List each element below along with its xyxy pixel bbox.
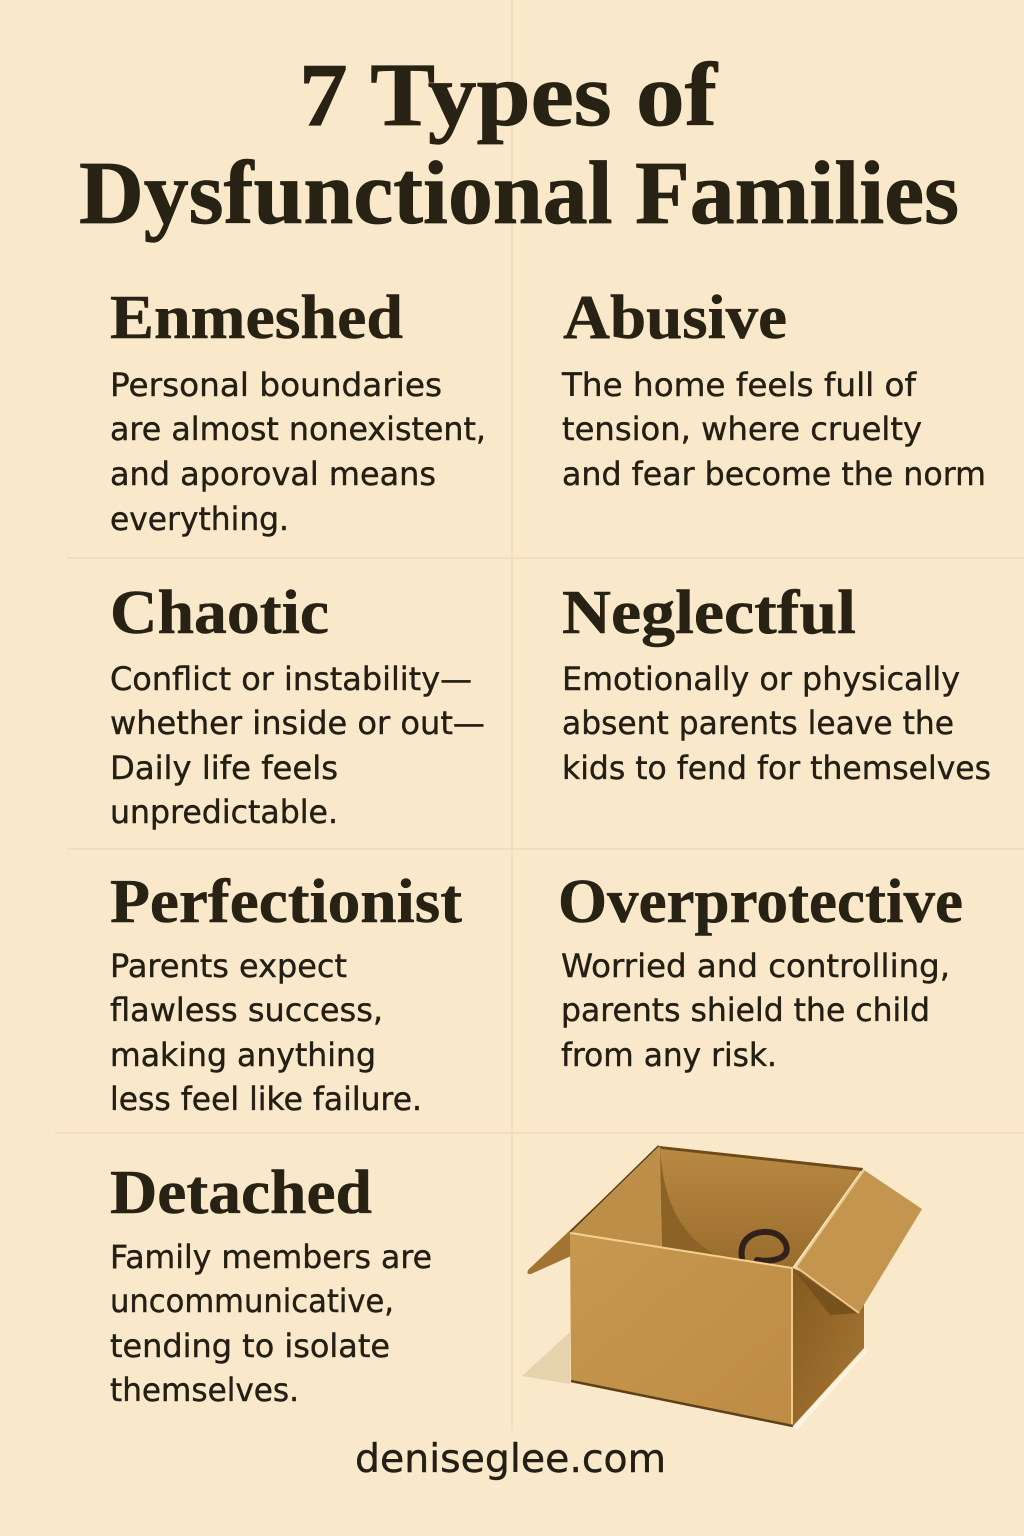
title (79, 46, 959, 243)
panel: Overprotective (558, 868, 963, 1074)
title: 7 Types of (299, 46, 718, 145)
panel: Abusive (561, 284, 986, 493)
panel: Abusive: and fear become the norm (562, 455, 986, 493)
icon: empty cardboard box (522, 1146, 922, 1430)
panel: Neglectful (562, 579, 991, 787)
panel: Enmeshed: are almost nonexistent, (110, 410, 486, 448)
panel: Neglectful: kids to fend for themselves (562, 749, 991, 787)
panel: Chaotic: Conflict or instability— (110, 660, 472, 698)
panel: Detached: themselves. (110, 1371, 299, 1409)
panel: Overprotective: parents shield the child (561, 991, 930, 1029)
title: Dysfunctional Families (79, 144, 959, 243)
panel: Neglectful: absent parents leave the (562, 704, 954, 742)
panel: Perfectionist: making anything (110, 1036, 376, 1074)
panel: Overprotective: from any risk. (561, 1036, 777, 1074)
website footer: deniseglee.com (355, 1437, 666, 1482)
panel: Perfectionist: flawless success, (110, 991, 383, 1029)
panel: Chaotic: unpredictable. (110, 793, 338, 831)
panel: Abusive: Abusive (563, 284, 787, 352)
panel: Neglectful: Emotionally or physically (562, 660, 960, 698)
panel: Detached: Family members are (110, 1238, 432, 1276)
panel: Perfectionist (110, 868, 462, 1118)
panel: Enmeshed: everything. (110, 500, 289, 538)
panel: Perfectionist: Perfectionist (110, 868, 462, 936)
panel: Overprotective: Worried and controlling, (561, 947, 950, 985)
panel: Detached (110, 1159, 432, 1409)
panel: Detached: tending to isolate (110, 1327, 390, 1365)
panel: Enmeshed: Enmeshed (110, 284, 403, 352)
panel: Enmeshed: Personal boundaries (110, 366, 442, 404)
panel: Perfectionist: less feel like failure. (110, 1080, 422, 1118)
panel: Chaotic: Chaotic (110, 579, 329, 647)
panel: Enmeshed (110, 284, 486, 538)
panel: Detached: uncommunicative, (110, 1282, 394, 1320)
panel: Abusive: tension, where cruelty (562, 410, 922, 448)
panel: Chaotic (110, 579, 485, 831)
panel: Overprotective: Overprotective (558, 868, 963, 936)
panel: Detached: Detached (110, 1159, 372, 1227)
icon: dark ring inside the box (742, 1232, 787, 1261)
panel: Chaotic: whether inside or out— (110, 704, 485, 742)
panel: Enmeshed: and aporoval means (110, 455, 436, 493)
panel: Neglectful: Neglectful (562, 579, 856, 647)
panel: Chaotic: Daily life feels (110, 749, 338, 787)
panel: Abusive: The home feels full of (561, 366, 917, 404)
panel: Perfectionist: Parents expect (110, 947, 347, 985)
